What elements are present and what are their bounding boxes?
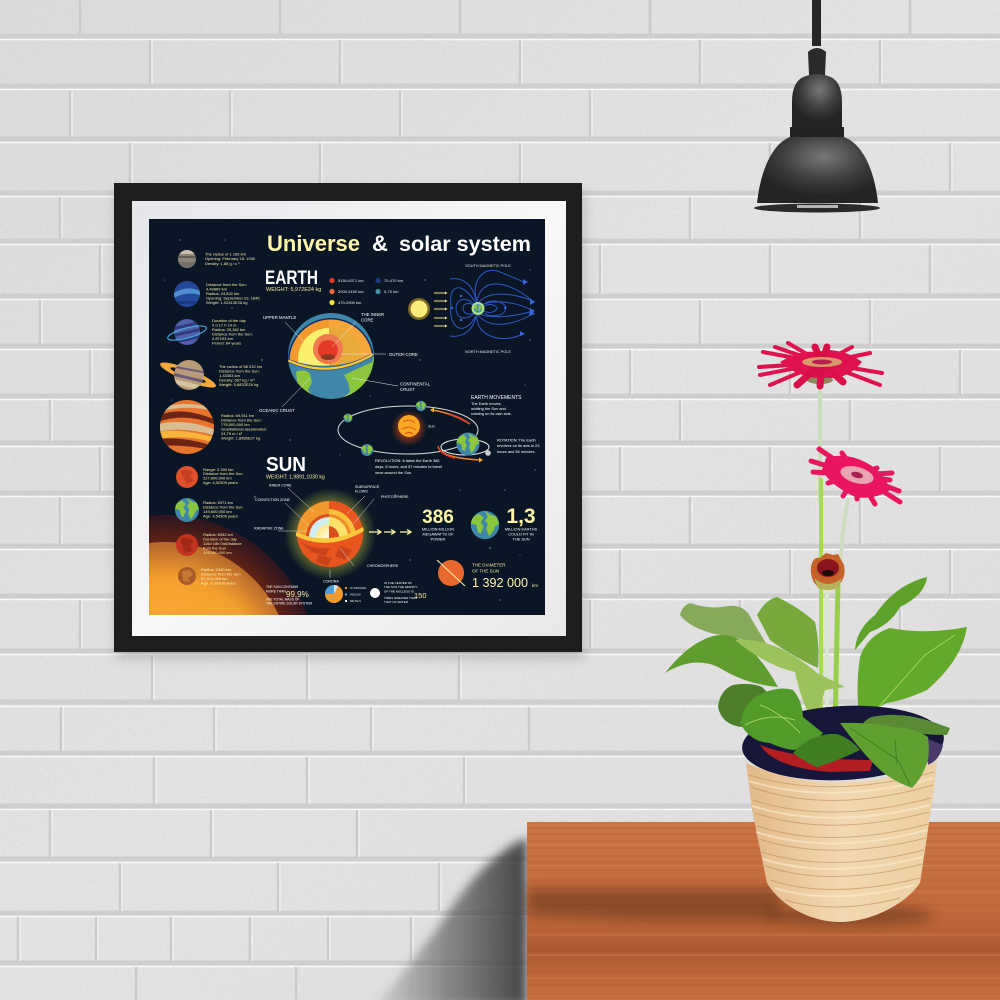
Earth movements text: EARTH MOVEMENTS — [471, 395, 522, 401]
planet: Mars: Distance from the Sun — [203, 471, 243, 476]
planet: Mercury: Age: 4,50309 years — [201, 580, 236, 586]
planet: Mars: Age: 4,50309 years — [203, 480, 238, 485]
stat: 386 — [422, 507, 454, 542]
small sun with rays — [408, 292, 448, 328]
basket pot — [740, 701, 946, 922]
leaf: lower right — [840, 723, 929, 788]
stat: 99,9% mass: THE TOTAL MASS OF — [266, 598, 299, 602]
planet: Uranus: 2,87193 km — [212, 336, 234, 341]
title — [267, 231, 531, 256]
Earth layer legend: 0-70 km — [384, 289, 399, 294]
Earth movements text: orbiting the Sun and — [471, 406, 506, 411]
stars — [164, 239, 536, 601]
planet: Mercury: Distance from the Sun — [201, 572, 241, 576]
planet: Mercury — [178, 567, 241, 586]
planet: Pluto-like — [176, 250, 256, 269]
planet: Jupiter: Weight: 1,8986E27 kg — [221, 436, 260, 440]
stat: 99,9% mass — [266, 585, 312, 606]
stat: Sun diameter: OF THE SUN — [472, 568, 499, 574]
stat: 99,9% mass: THE ENTIRE SOLAR SYSTEM — [266, 602, 312, 606]
title: solar system — [399, 231, 531, 256]
planet: Uranus: Period: 84 years — [212, 340, 241, 346]
planet: Jupiter — [158, 400, 267, 454]
Earth heading: EARTH — [265, 268, 318, 289]
Earth heading: WEIGHT: 5,972E24 kg — [266, 287, 321, 293]
planet: Mercury: 57,910,000 km — [201, 576, 228, 581]
pot rim — [740, 701, 946, 785]
planet: Jupiter: 24,79 m / s² — [221, 431, 243, 436]
planet: Uranus: Duration of the day — [212, 318, 246, 323]
leaf: back dark — [718, 684, 775, 727]
wooden table — [527, 822, 1000, 1000]
Sun cutaway labels: PHOTOSPHERE — [381, 495, 409, 499]
planet: Uranus: Radius: 25,362 km — [212, 327, 246, 332]
Sun cutaway labels: INNER CORE — [269, 484, 292, 488]
Earth movements text: The Earth moves, — [471, 401, 502, 406]
planet: Neptune: Opening: September 23, 1846 — [206, 296, 260, 300]
Earth cutaway — [288, 313, 374, 399]
planet: Venus: 108,000,000 km — [203, 550, 232, 555]
stat: Sun diameter: km — [532, 583, 538, 588]
Sun cutaway labels: CHROMOSPHERE — [367, 564, 399, 568]
Earth cutaway labels: OCEANIC CRUST — [259, 408, 295, 413]
Earth movements text: REVOLUTION: It takes the Earth 365 — [375, 458, 439, 463]
Earth movements orbit diagram — [338, 401, 491, 462]
flower stems — [820, 385, 848, 730]
stat: nucleus density 150: 150 — [414, 591, 427, 600]
Sun cutaway labels: FLOWS — [355, 490, 368, 494]
stat: 386: MEGAWATTS OF — [423, 532, 454, 536]
Sun cutaway labels — [254, 484, 409, 584]
pendant lamp — [754, 0, 880, 212]
inner red pot — [760, 745, 873, 772]
pie chart: Sun composition: HYDROGEN — [350, 586, 366, 590]
stat: 99,9% mass: MORE THAN — [266, 590, 286, 594]
planet: Mars — [176, 466, 243, 488]
Earth cutaway labels: THE INNER — [361, 312, 384, 317]
leaf: back right flat — [863, 715, 950, 735]
Sun heading: WEIGHT: 1,9891,1030 kg — [266, 474, 325, 480]
planet: Pluto-like: The radius of 1 186 km — [205, 252, 247, 256]
planet: Earth — [175, 498, 243, 522]
stat: nucleus density 150: TIMES GREATER THAN — [384, 596, 417, 600]
stat: 386: MILLION MILLION — [422, 526, 454, 532]
black frame — [114, 183, 582, 652]
Sun cutaway — [284, 488, 376, 580]
Earth magnetic field diagram: NORTH MAGNETIC POLE — [465, 350, 511, 354]
planet: Mercury: Radius: 2440 km — [201, 567, 232, 572]
Sun heading — [266, 453, 325, 480]
Earth movements text: once around the Sun. — [375, 470, 412, 475]
Earth movements text: ROTATION: The Earth — [497, 438, 536, 442]
stat: 386: POWER — [431, 536, 446, 542]
stat: Sun diameter: 1 392 000 — [472, 575, 528, 590]
planet: Saturn — [160, 360, 262, 390]
Sun cutaway labels: CORONA — [323, 580, 339, 584]
planet: Neptune: Radius: 24,622 km — [206, 291, 240, 296]
front leaves — [740, 689, 950, 788]
stat: Sun diameter: THE DIAMETER — [472, 562, 506, 568]
Earth layer legend — [329, 278, 404, 305]
planet: Uranus — [166, 318, 253, 346]
wall shadow beside the table — [375, 838, 527, 1000]
planet: Jupiter: Gravitational acceleration: — [221, 426, 267, 432]
Earth layer legend: 5150-6371 km — [338, 278, 364, 283]
planet: Saturn: Weight: 5,6832E26 kg — [219, 382, 258, 387]
planet: Uranus: Distance from the Sun: — [212, 332, 253, 336]
title: & — [372, 231, 388, 256]
Earth magnetic field diagram — [450, 264, 535, 354]
planet: Saturn: 1,43353 km — [219, 373, 241, 378]
planet: Venus: 116d 18h 0mDistance — [203, 541, 242, 546]
Earth movements text: days, 5 hours, and 57 minutes to travel — [375, 464, 442, 469]
stat: 1,3 with Earth icon: COULD FIT IN — [508, 532, 534, 536]
Sun heading: SUN — [266, 453, 306, 476]
planet: Earth: Age: 4,54309 years — [203, 514, 238, 518]
leaf: tall right — [855, 577, 927, 650]
leaf: round front — [740, 689, 823, 750]
leaf: left wide — [665, 635, 778, 687]
planet: Saturn: The radius of 58 232 km — [219, 364, 263, 369]
white mat — [132, 201, 566, 636]
planet: Venus: from the Sun — [203, 546, 226, 550]
leaf: light arched — [735, 640, 845, 725]
planet: Uranus: 0 d 17 h 14 m — [212, 322, 237, 328]
Earth layer legend: 2900-5150 km — [338, 289, 364, 294]
Earth cutaway labels: CONTINENTAL — [400, 382, 431, 386]
planet: Mars: Range: 3 390 km — [203, 467, 234, 472]
Earth movements text — [375, 395, 539, 475]
stat: Sun diameter — [437, 560, 538, 590]
stat: 1,3 with Earth icon: 1,3 — [506, 505, 536, 528]
poster dark background — [149, 219, 545, 615]
leaf: centre tall — [757, 597, 819, 668]
Earth cutaway labels: UPPER MANTLE — [263, 315, 297, 320]
flower: middle gerbera — [811, 449, 900, 504]
Earth magnetic field diagram: SOUTH MAGNETIC POLE — [465, 264, 511, 268]
leaf vein — [867, 635, 955, 720]
planet: Venus: Duration of the day — [203, 536, 237, 542]
Earth cutaway labels: OUTER-CORE — [389, 352, 418, 357]
big sun, lower left — [149, 515, 308, 615]
stat: nucleus density 150: OF THE NUCLEUS IS — [384, 590, 414, 594]
pie chart: Sun composition — [325, 585, 366, 603]
Earth cutaway labels — [259, 312, 431, 413]
Earth movements orbit diagram: Sun — [428, 424, 435, 428]
planet: Neptune — [174, 281, 260, 307]
planet: Pluto-like: Opening: February 18, 1930 — [205, 256, 256, 261]
basket body — [746, 762, 937, 922]
Earth movements text: revolves on its axis in 23 — [497, 443, 539, 448]
leaf: big right — [858, 627, 967, 722]
planet: Venus — [176, 532, 242, 556]
planet: Neptune: Distance from the Sun: — [206, 282, 247, 287]
plant leaves — [665, 577, 967, 727]
planet: Pluto-like: Density: 1.88 g / c ³ — [205, 261, 240, 266]
pie chart: Sun composition: HELIUM — [350, 592, 361, 596]
stat: 1,3 with Earth icon — [471, 505, 538, 542]
pie chart: Sun composition: METALS — [350, 599, 361, 603]
Earth movements text: rotating on its own axis. — [471, 411, 512, 416]
stat: 99,9% mass: 99,9% — [286, 590, 309, 599]
leaf: upper left — [680, 603, 770, 650]
framed poster — [110, 183, 590, 664]
stat: nucleus density 150 — [370, 581, 427, 604]
planet: Mars: 227,900,000 km — [203, 476, 232, 480]
planet: Neptune: 4,49869 km — [206, 286, 228, 292]
flower bud — [811, 553, 845, 590]
Earth layer legend: 70-470 km — [384, 278, 404, 283]
Earth layer legend: 470-2900 km — [338, 300, 362, 305]
title: Universe — [267, 231, 360, 256]
Earth cutaway labels: CRUST — [400, 387, 415, 392]
stat: 99,9% mass: THE SUN CONTAINS — [266, 585, 299, 589]
Earth cutaway labels: CORE — [361, 318, 374, 322]
planet: Earth: Radius: 6371 km — [203, 500, 234, 505]
planet: Jupiter: Radius: 69,911 km — [221, 413, 255, 418]
leaf: lower middle — [793, 734, 860, 767]
planet: Saturn: Distance from the Sun: — [219, 368, 260, 374]
stat: 386: 386 — [422, 507, 454, 528]
Earth movements text: hours and 56 minutes. — [497, 449, 536, 454]
planet: Jupiter: Distance from the Sun: — [221, 418, 262, 422]
stat: 1,3 with Earth icon: MILLION EARTHS — [505, 526, 538, 532]
stat: 1,3 with Earth icon: THE SUN — [512, 536, 530, 542]
planet: Neptune: Weight: 1,02413E26 kg — [206, 300, 248, 305]
Sun cutaway labels: RADIATIVE ZONE — [254, 526, 284, 530]
planet: Venus: Radius: 6052 km — [203, 532, 234, 537]
arrows from Sun to power figure — [369, 530, 411, 534]
Sun cutaway labels: SUBSURFACE — [355, 485, 380, 489]
planet: Earth: Distance from the Sun — [203, 504, 243, 510]
planet: Saturn: Density: 687 kg / m³ — [219, 378, 255, 382]
frame shadow — [116, 190, 584, 658]
stat: nucleus density 150: THAT OF WATER — [384, 600, 409, 604]
planet: Earth: 149,600,000 km — [203, 509, 232, 514]
stat: nucleus density 150: THE SUN THE DENSITY — [384, 585, 418, 589]
stat: nucleus density 150: IN THE CENTER OF — [384, 581, 412, 585]
flower: top gerbera — [759, 343, 882, 386]
Sun cutaway labels: CONVECTION ZONE — [255, 498, 291, 502]
planet: Jupiter: 778,500,000 km — [221, 422, 250, 427]
